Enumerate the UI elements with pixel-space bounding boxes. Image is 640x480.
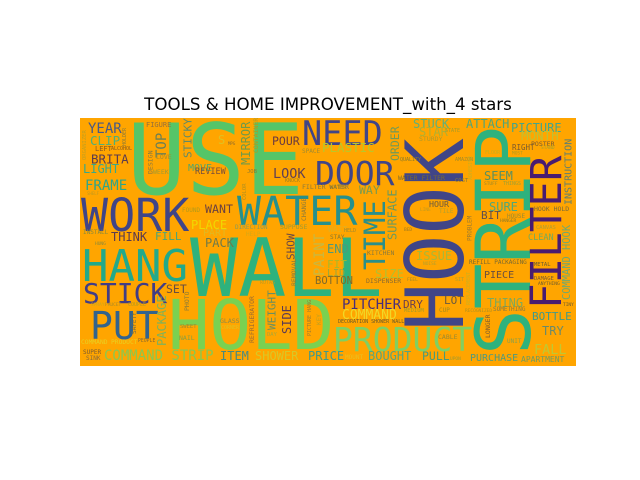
- medium and small horizontal words: MOST: [512, 150, 523, 156]
- medium and small horizontal words: SET: [166, 282, 187, 296]
- medium and small horizontal words: STUFF: [484, 181, 498, 187]
- medium and small horizontal words: LOVE: [156, 153, 172, 161]
- medium and small horizontal words: HELP: [246, 231, 261, 238]
- medium and small vertical words: HOLDER: [122, 127, 128, 146]
- medium and small horizontal words: SINK: [86, 355, 101, 362]
- medium and small horizontal words: SWEET: [180, 324, 197, 330]
- medium and small horizontal words: TRY: [542, 324, 564, 338]
- medium and small horizontal words: RECOGNIZED: [465, 308, 492, 314]
- medium and small horizontal words: FIGURE: [146, 121, 171, 129]
- medium and small horizontal words: WAIT: [328, 225, 347, 234]
- medium and small horizontal words: CANVAS: [536, 225, 556, 231]
- medium and small horizontal words: CLEAN: [528, 233, 554, 243]
- medium and small vertical words: PICTURE HANG: [307, 300, 313, 336]
- medium and small horizontal words: HELD: [344, 228, 356, 234]
- medium and small horizontal words: COST: [455, 178, 469, 184]
- medium and small horizontal words: REVIEW: [195, 167, 227, 177]
- medium and small horizontal words: KNOCK: [285, 178, 300, 184]
- medium and small vertical words: CONTAINER: [252, 118, 260, 153]
- medium and small horizontal words: WEEK: [153, 168, 169, 176]
- medium and small horizontal words: STATE: [445, 128, 460, 134]
- medium and small horizontal words: PULL: [422, 349, 450, 363]
- medium and small vertical words: PROBLEM: [466, 215, 474, 241]
- medium and small horizontal words: MOUNT: [345, 354, 363, 361]
- medium and small horizontal words: DISPENSER: [366, 277, 401, 285]
- medium and small horizontal words: THING: [487, 296, 523, 310]
- medium and small vertical words: KEY: [316, 314, 323, 325]
- medium and small horizontal words: KITCHEN: [367, 249, 394, 257]
- medium and small horizontal words: DECORATION SHOWER WALL: [338, 319, 404, 325]
- medium and small horizontal words: FAUCET: [105, 302, 122, 308]
- medium and small horizontal words: STUCK: [413, 117, 450, 131]
- medium and small horizontal words: COMMAND STRIP: [104, 348, 214, 364]
- medium and small vertical words: COMMAND HOOK: [561, 224, 573, 300]
- medium and small horizontal words: PITCHER: [342, 297, 402, 313]
- medium and small horizontal words: TINY: [563, 302, 574, 308]
- medium and small horizontal words: BOTTLE: [532, 310, 572, 323]
- medium and small horizontal words: LOOK: [273, 166, 306, 182]
- large word: HANG: HANG: [82, 241, 188, 292]
- medium and small horizontal words: STURDY: [419, 135, 443, 143]
- medium and small horizontal words: LIGHT: [83, 162, 119, 176]
- medium and small vertical words: STICKY: [182, 118, 194, 158]
- medium and small horizontal words: FILL: [155, 230, 182, 243]
- medium and small horizontal words: RIGHT: [512, 143, 535, 152]
- medium and small horizontal words: PRICE: [308, 349, 344, 363]
- medium and small horizontal words: SHOWER: [255, 349, 299, 363]
- medium and small horizontal words: POSTER: [531, 140, 555, 148]
- medium and small horizontal words: FALL: [534, 342, 567, 358]
- medium and small horizontal words: PURCHASE: [470, 353, 518, 364]
- medium and small vertical words: ADHESIVE: [468, 156, 474, 180]
- medium and small horizontal words: SPACE: [302, 148, 320, 155]
- medium and small horizontal words: ALCOHOL: [111, 146, 132, 152]
- large word: HOLD: HOLD: [168, 286, 334, 366]
- medium and small vertical words: ORDER: [388, 126, 402, 161]
- medium and small horizontal words: ITEM: [220, 349, 249, 363]
- medium and small vertical words: SAFETY: [131, 312, 138, 334]
- medium and small horizontal words: FOUND: [182, 207, 200, 214]
- medium and small vertical words: PAINT: [312, 233, 328, 276]
- medium and small vertical words: MIRROR: [239, 121, 253, 165]
- medium and small horizontal words: DIRECTION: [235, 224, 268, 231]
- medium and small horizontal words: ROTAS: [260, 280, 275, 286]
- medium and small vertical words: PACKAGE: [155, 295, 169, 346]
- medium and small horizontal words: GLASS: [220, 317, 240, 325]
- medium and small horizontal words: TILE: [439, 208, 454, 215]
- medium and small horizontal words: MOVE: [188, 163, 212, 174]
- medium and small horizontal words: MPG: [228, 141, 236, 146]
- medium and small horizontal words: CLIP: [90, 133, 120, 148]
- medium and small vertical words: INSTRUCTION: [564, 139, 574, 205]
- medium and small horizontal words: PLACE: [191, 218, 227, 232]
- medium and small horizontal words: POUR: [272, 134, 300, 148]
- medium and small horizontal words: PLASTIC: [322, 140, 375, 155]
- medium and small horizontal words: ATTACH: [466, 117, 509, 131]
- medium and small horizontal words: THINGS: [503, 181, 521, 187]
- medium and small vertical words: REFRIGERATOR: [248, 296, 256, 343]
- medium and small horizontal words: STAY: [330, 234, 345, 241]
- medium and small horizontal words: BOUGHT: [368, 349, 411, 363]
- medium and small vertical words: TOP: [154, 133, 170, 158]
- word: PUT: PUT: [90, 304, 159, 348]
- medium and small horizontal words: INSTALL: [83, 229, 109, 236]
- medium and small horizontal words: BED: [404, 227, 412, 233]
- medium and small vertical words: REMOVAL: [290, 259, 298, 286]
- medium and small horizontal words: COMMAND: [81, 339, 108, 346]
- medium and small horizontal words: PRODUCT: [111, 339, 138, 346]
- medium and small horizontal words: PIECE: [484, 270, 514, 281]
- medium and small horizontal words: AMAZON: [455, 157, 473, 163]
- medium and small vertical words: CHANGE: [300, 197, 308, 221]
- medium and small horizontal words: JOB: [247, 169, 258, 175]
- medium and small horizontal words: PEOPLE: [138, 338, 155, 344]
- medium and small horizontal words: NOISE: [423, 261, 437, 267]
- large word: WATER: WATER: [237, 189, 358, 235]
- medium and small horizontal words: ANYTHING: [538, 281, 560, 287]
- large word: WALL: WALL: [190, 222, 383, 315]
- medium and small vertical words: DESIGN: [146, 150, 154, 174]
- medium and small horizontal words: SOMETHING: [493, 306, 526, 313]
- medium and small horizontal words: LOT: [444, 294, 464, 307]
- medium and small horizontal words: CORNER: [221, 325, 240, 331]
- medium and small horizontal words: SEEM: [484, 169, 513, 183]
- medium and small horizontal words: SURE: [489, 200, 518, 214]
- medium and small horizontal words: DRY: [403, 298, 423, 311]
- word: STICK: STICK: [83, 277, 167, 310]
- medium and small vertical words: COLOR: [242, 183, 248, 200]
- medium and small horizontal words: PICTURE: [511, 121, 562, 135]
- medium and small horizontal words: STAR: [419, 125, 449, 139]
- medium and small horizontal words: BOTTON: [315, 275, 353, 287]
- medium and small horizontal words: SUPPOSE: [280, 223, 307, 231]
- medium and small horizontal words: SIT: [455, 277, 464, 283]
- medium and small horizontal words: COUPLE: [128, 302, 146, 308]
- medium and small vertical words: SIDE: [280, 305, 294, 334]
- medium and small horizontal words: SIZE: [375, 267, 404, 281]
- medium and small horizontal words: PACK: [205, 236, 235, 250]
- medium and small horizontal words: STAND: [541, 145, 555, 151]
- medium and small horizontal words: FIT: [327, 258, 347, 271]
- medium and small horizontal words: REFILL PACKAGING: [469, 259, 527, 266]
- word: NEED: NEED: [302, 114, 383, 153]
- medium and small horizontal words: WATER FILTER: [398, 174, 445, 182]
- medium and small horizontal words: FRAME: [85, 178, 127, 194]
- medium and small horizontal words: LEFT: [95, 145, 113, 153]
- medium and small horizontal words: CUP: [439, 307, 450, 314]
- medium and small horizontal words: UPON: [450, 356, 461, 362]
- medium and small horizontal words: YEAR: [88, 121, 122, 137]
- medium and small vertical words: WEIGHT: [266, 290, 279, 330]
- medium and small horizontal words: DAMAGE: [534, 276, 554, 282]
- medium and small horizontal words: MEDIUM: [404, 308, 425, 314]
- medium and small vertical words: LONGER: [484, 314, 492, 338]
- medium and small horizontal words: PART: [203, 228, 227, 239]
- medium and small horizontal words: BIT: [481, 209, 501, 222]
- medium and small horizontal words: SHELF: [87, 191, 100, 196]
- medium and small horizontal words: WAY: [359, 183, 380, 197]
- medium and small horizontal words: METAL: [534, 262, 551, 268]
- medium and small vertical words: SURFACE: [386, 189, 400, 240]
- large word: WORK: WORK: [81, 189, 189, 242]
- medium and small horizontal words: FILTER WATER: [302, 183, 349, 191]
- word: PRODUCT: PRODUCT: [333, 320, 472, 359]
- medium and small vertical words: REPLACEMENT: [466, 272, 472, 305]
- word cloud words: [81, 104, 574, 366]
- medium and small horizontal words: UNIT: [507, 338, 522, 345]
- medium and small horizontal words: THINK: [111, 230, 148, 244]
- medium and small vertical words: ORGANIZER: [82, 130, 88, 160]
- medium and small horizontal words: ISSUE: [416, 249, 452, 263]
- medium and small horizontal words: LID: [327, 268, 345, 279]
- word: TIME: TIME: [358, 200, 392, 270]
- medium and small horizontal words: CABLE: [438, 333, 458, 341]
- medium and small horizontal words: HOOK HOLD: [534, 205, 569, 213]
- medium and small horizontal words: SUPER: [83, 349, 101, 356]
- medium and small horizontal words: SPRAY: [91, 302, 105, 308]
- medium and small horizontal words: HANGER: [500, 218, 517, 224]
- medium and small vertical words: PHOTO: [183, 291, 191, 311]
- word: DOOR: DOOR: [315, 154, 395, 193]
- word cloud panel: [80, 104, 576, 366]
- large word: HOOK: HOOK: [389, 138, 482, 331]
- large word: STRIP: STRIP: [459, 126, 548, 355]
- medium and small horizontal words: LINE: [420, 207, 431, 213]
- panel background: [80, 118, 576, 366]
- medium and small horizontal words: QUALITY: [400, 157, 421, 163]
- medium and small horizontal words: [81, 117, 574, 364]
- medium and small horizontal words: FLOOR: [485, 150, 501, 156]
- title: TOOLS & HOME IMPROVEMENT_with_4 stars: [143, 95, 512, 115]
- medium and small horizontal words: WANT: [205, 202, 233, 216]
- medium and small horizontal words: FEEL: [407, 277, 418, 283]
- medium and small vertical words: [82, 118, 574, 346]
- medium and small horizontal words: NAIL: [179, 334, 195, 342]
- medium and small horizontal words: HOUR: [429, 199, 449, 209]
- medium and small horizontal words: END: [327, 242, 349, 256]
- medium and small horizontal words: COMMAND: [342, 308, 397, 323]
- medium and small horizontal words: MONTH: [521, 128, 559, 143]
- medium and small horizontal words: APARTMENT: [521, 355, 565, 364]
- medium and small horizontal words: BRITA: [91, 152, 129, 166]
- medium and small horizontal words: S: [218, 133, 225, 147]
- large word: USE: USE: [127, 104, 304, 218]
- medium and small horizontal words: HOUSE: [507, 213, 525, 220]
- medium and small horizontal words: DAY: [267, 332, 278, 338]
- medium and small horizontal words: WATER: [330, 185, 347, 191]
- medium and small vertical words: SHOW: [284, 233, 298, 260]
- large word: FILTER: FILTER: [523, 155, 572, 309]
- medium and small horizontal words: HUNG: [95, 241, 106, 247]
